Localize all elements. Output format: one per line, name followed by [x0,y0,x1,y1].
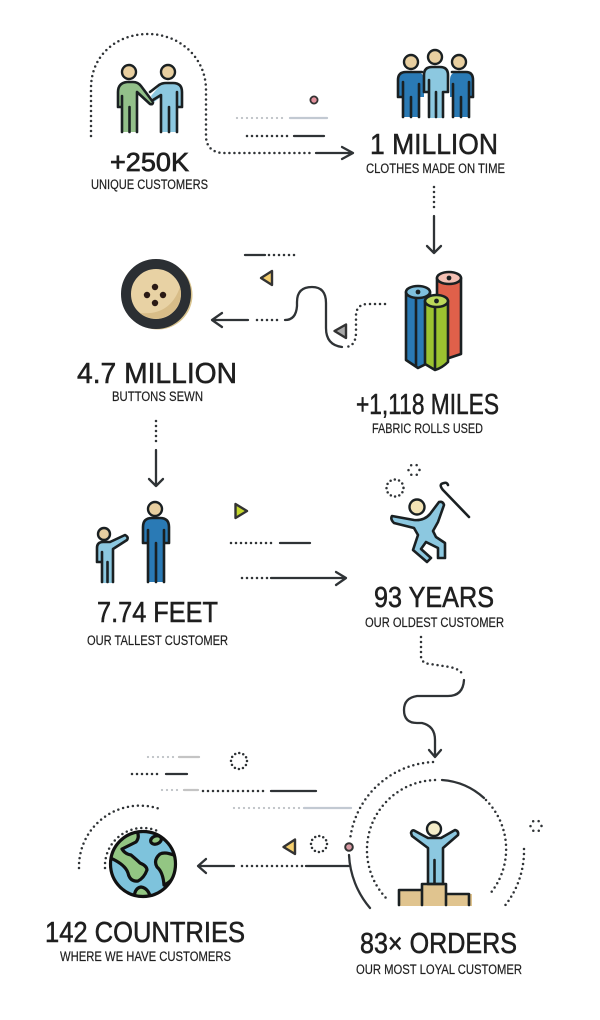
icon: fabric rolls [406,272,461,370]
stat: +1,118 miles: FABRIC ROLLS USED [372,421,483,436]
stat: 7.74 feet [87,597,228,648]
stat: 1 million: 1 MILLION [370,129,498,161]
icon: yellow triangle near globe [284,840,295,854]
decorative speed line: above feet arrow [231,542,310,544]
decorative arcs around podium [349,762,542,908]
stat: 1 million [366,129,505,176]
stat: +250K: UNIQUE CUSTOMERS [91,177,208,192]
icon: pink dot [345,843,353,851]
stat: 7.74 feet: 7.74 FEET [97,597,218,629]
icon: yellow triangle [261,271,272,285]
stat: 83x orders [356,928,522,977]
icon: three people [398,50,474,118]
arrow: clothes to fabric [427,187,441,253]
stat: 142 countries: WHERE WE HAVE CUSTOMERS [60,949,231,964]
stat: 4.7 million: BUTTONS SEWN [112,389,203,404]
arrow: feet to years [242,572,346,585]
decorative speed lines: bottom left [132,757,351,808]
decorative dotted arcs above globe [79,806,160,868]
stat: 4.7 million [77,358,237,404]
stat: 83x orders: OUR MOST LOYAL CUSTOMER [356,962,522,977]
stat: 142 countries [45,917,245,964]
icon: globe [108,828,180,900]
stat: 7.74 feet: OUR TALLEST CUSTOMER [87,633,228,648]
stat: 83x orders: 83× ORDERS [360,928,517,960]
icon: button [124,260,192,330]
stat: +1,118 miles [356,389,499,436]
icon: oldest customer dancing with cane [386,464,469,562]
connector: customers to clothes arrow [91,34,353,159]
decorative speed lines: top [237,96,327,136]
stat: 93 years [365,582,504,630]
icon: loyal customer on podium [399,822,472,906]
stat: 4.7 million: 4.7 MILLION [77,358,237,390]
icon: two customers shaking hands [118,65,182,132]
stat: +250K [91,147,208,192]
arrow: orders to countries [198,859,349,873]
stat: 93 years: OUR OLDEST CUSTOMER [365,615,504,630]
icon: gray triangle [334,324,346,338]
arrow: buttons to feet [149,421,163,486]
stat: 1 million: CLOTHES MADE ON TIME [366,161,505,176]
stat: 93 years: 93 YEARS [374,582,494,614]
decorative speed line: above button [245,254,299,256]
connector: years to orders wavy arrow [404,637,464,757]
icon: tall customer and child [97,502,169,583]
icon: green triangle [236,504,247,518]
stat: 142 countries: 142 COUNTRIES [45,917,245,949]
connector: fabric to buttons wavy arrow [212,287,385,347]
stat: +250K: +250K [110,147,190,177]
decorative dotted circles [231,753,327,852]
stat: +1,118 miles: +1,118 MILES [356,389,499,421]
